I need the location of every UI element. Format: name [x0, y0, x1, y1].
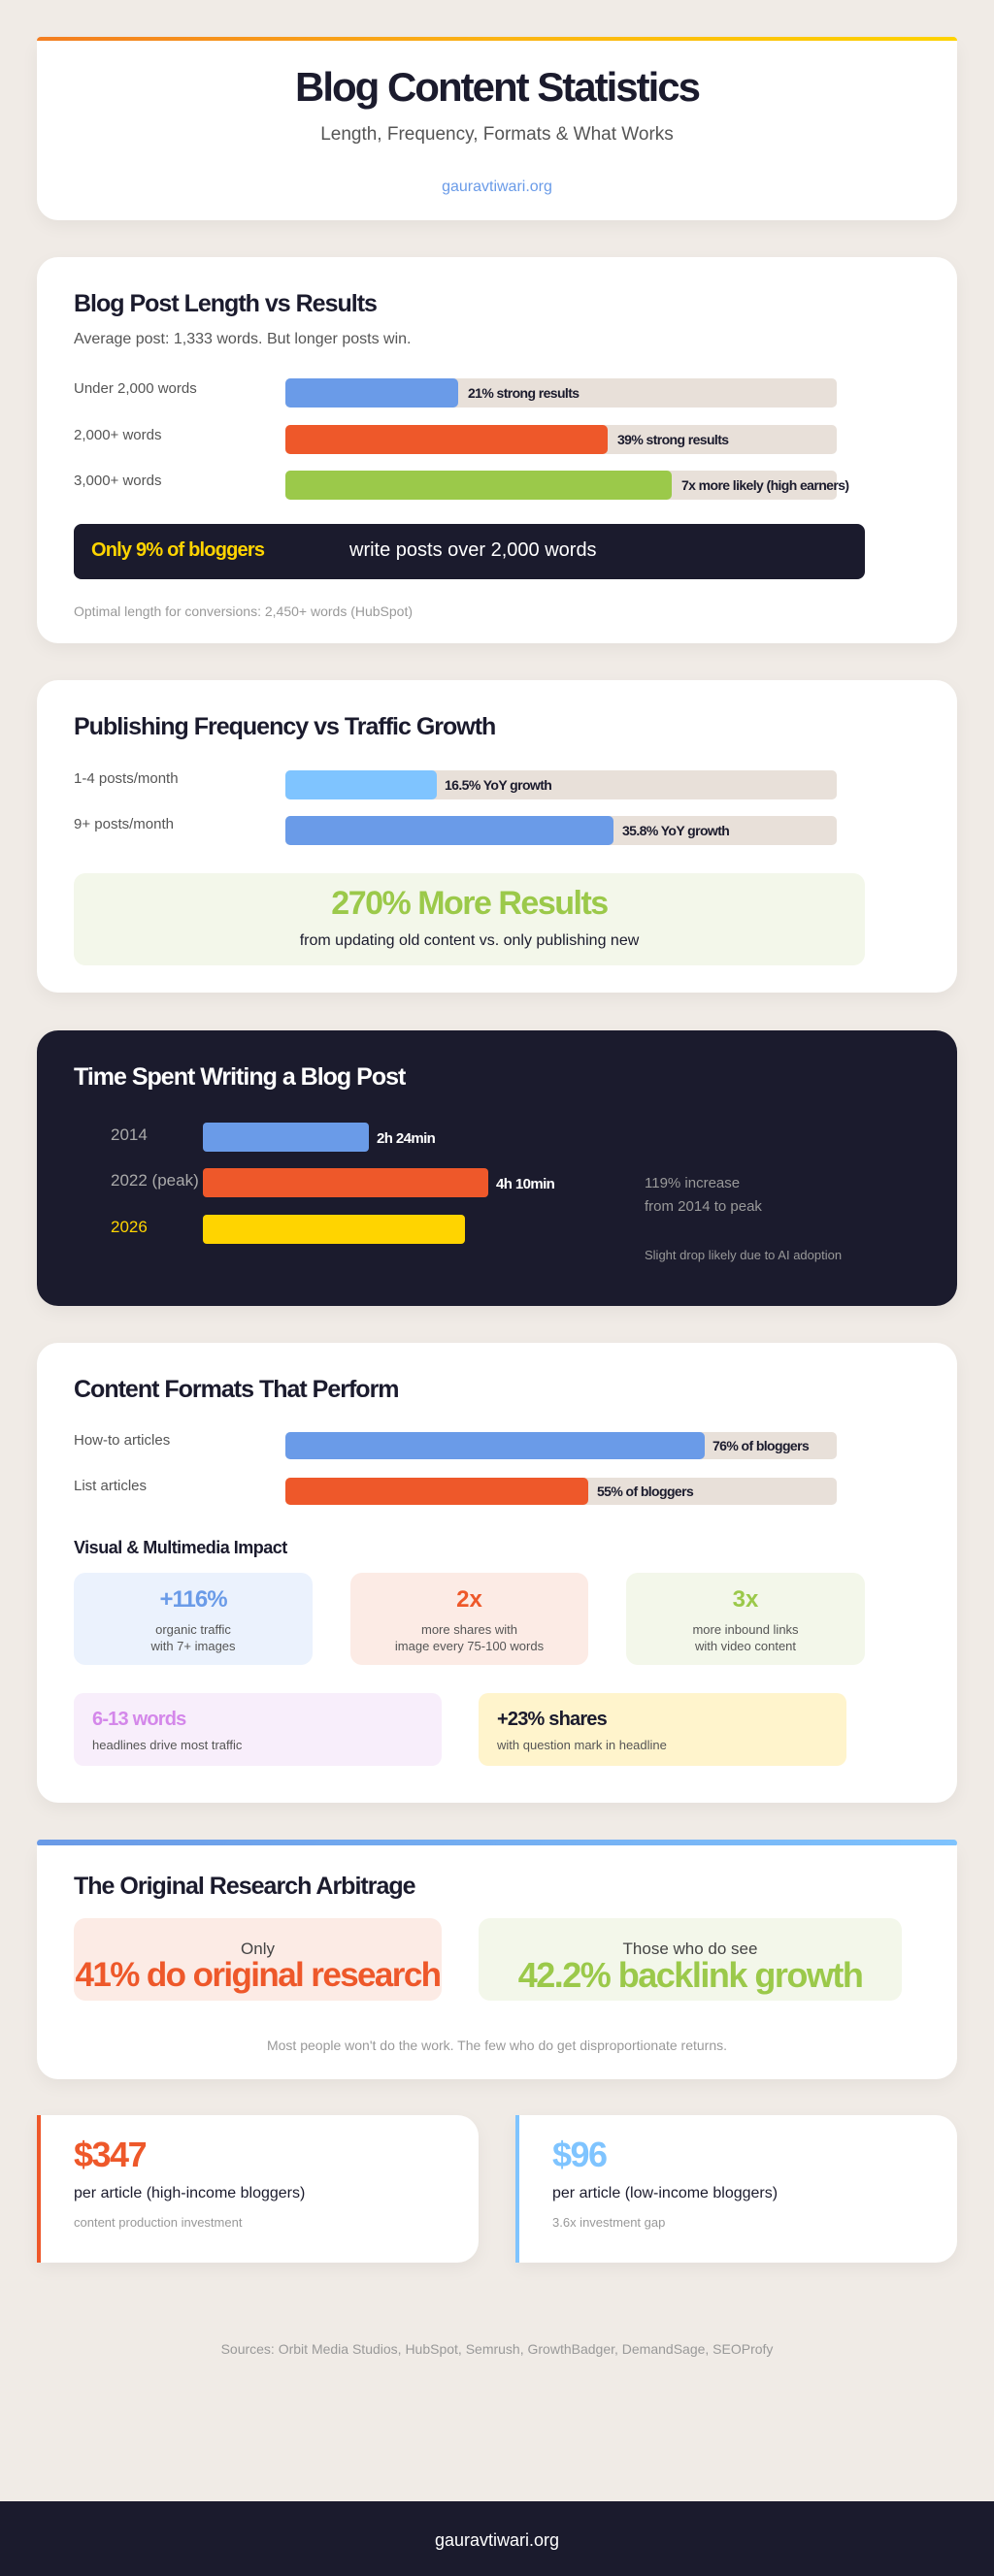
card: $347 — [37, 2115, 479, 2263]
stat box: +116%: with 7+ images — [150, 1639, 236, 1653]
heading: Content Formats That Perform — [74, 1376, 399, 1403]
research gradient bar — [37, 1840, 957, 1846]
panel: content formats — [37, 1343, 957, 1803]
footnote: Most people won't do the work. The few who do get disproportionate returns. — [267, 2038, 727, 2053]
callout: only 9%: Only 9% of bloggers — [91, 539, 264, 561]
subheading: visual impact: Visual & Multimedia Impact — [74, 1538, 287, 1557]
bar: 2026: 2026 — [111, 1218, 148, 1236]
stat box: 2x — [350, 1573, 588, 1665]
footer: gauravtiwari.org — [435, 2530, 559, 2550]
panel: publishing frequency — [37, 680, 957, 993]
bar: 2014 — [111, 1123, 435, 1152]
bar: 2000+ — [74, 425, 837, 454]
stat box: question mark: +23% shares — [497, 1709, 607, 1730]
stat box: 3x — [626, 1573, 865, 1665]
side note: AI: Slight drop likely due to AI adoption — [645, 1248, 842, 1262]
bar: 2000+: 2,000+ words — [74, 427, 161, 443]
card: $347: content production investment — [74, 2215, 242, 2230]
box: 42.2%: 42.2% backlink growth — [518, 1955, 862, 1995]
bar: 9+ posts: 9+ posts/month — [74, 816, 174, 832]
stat box: 2x: more shares with — [421, 1622, 517, 1637]
site link: gauravtiwari.org — [442, 179, 552, 195]
bar: 2022 peak: 4h 10min — [496, 1176, 554, 1192]
side note: increase: from 2014 to peak — [645, 1198, 762, 1215]
card: $96: $96 — [552, 2135, 607, 2174]
heading: The Original Research Arbitrage — [74, 1873, 415, 1900]
sources: Sources: Orbit Media Studios, HubSpot, Semrush, GrowthBadger, DemandSage, SEOProfy — [221, 2341, 773, 2357]
bar: 2014: 2h 24min — [377, 1130, 435, 1147]
footer — [0, 2501, 994, 2576]
card: $347: per article (high-income bloggers) — [74, 2185, 305, 2201]
callout: only 9% — [74, 524, 865, 579]
panel: time spent writing (dark) — [37, 1030, 957, 1306]
heading: Blog Post Length vs Results — [74, 290, 377, 317]
bar: 1-4 posts — [74, 770, 837, 799]
box: 42.2% — [479, 1918, 902, 2001]
bar: 2022 peak: 2022 (peak) — [111, 1171, 199, 1190]
panel: original research — [37, 1845, 957, 2079]
heading: Time Spent Writing a Blog Post — [74, 1063, 405, 1091]
callout: 270% more results: from updating old content vs. only publishing new — [300, 932, 639, 949]
title: Blog Content Statistics — [295, 64, 699, 110]
stat box: headlines: headlines drive most traffic — [92, 1738, 242, 1752]
panel: blog post length — [37, 257, 957, 643]
subtitle: Length, Frequency, Formats & What Works — [320, 124, 674, 145]
bar: 2022 peak — [111, 1168, 554, 1197]
bar: under 2000 — [74, 378, 837, 408]
bar: 1-4 posts: 16.5% YoY growth — [445, 777, 551, 793]
stat box: 2x: image every 75-100 words — [395, 1639, 544, 1653]
stat box: question mark: with question mark in headline — [497, 1738, 667, 1752]
box: 41%: 41% do original research — [76, 1956, 440, 1994]
box: 42.2%: Those who do see — [623, 1940, 757, 1958]
side note: increase — [645, 1175, 762, 1215]
stat box: headlines: 6-13 words — [92, 1709, 185, 1730]
bar: how-to: 76% of bloggers — [712, 1438, 809, 1453]
bar: how-to: How-to articles — [74, 1432, 170, 1449]
bar: 2000+: 39% strong results — [617, 432, 728, 447]
card: $96: per article (low-income bloggers) — [552, 2185, 778, 2201]
bar: under 2000: 21% strong results — [468, 385, 579, 401]
stat box: question mark — [479, 1693, 846, 1766]
callout: 270% more results — [74, 873, 865, 965]
stat box: +116%: organic traffic — [155, 1622, 231, 1637]
stat box: +116% — [74, 1573, 313, 1665]
header card — [37, 41, 957, 220]
card: $347: $347 — [74, 2135, 146, 2174]
bar: 3000+: 7x more likely (high earners) — [681, 477, 848, 493]
bar: 3000+: 3,000+ words — [74, 473, 161, 489]
bar: 9+ posts: 35.8% YoY growth — [622, 823, 729, 838]
stat box: 3x: with video content — [695, 1639, 796, 1653]
callout: only 9%: write posts over 2,000 words — [349, 539, 597, 561]
stat box: 2x: 2x — [456, 1586, 482, 1613]
box: 41% — [74, 1918, 442, 2001]
box: 41%: Only — [241, 1940, 275, 1958]
header gradient bar — [37, 37, 957, 45]
bar: 2026 — [111, 1215, 465, 1244]
card: $96: 3.6x investment gap — [552, 2215, 665, 2230]
bar: how-to — [74, 1432, 837, 1459]
bar: 3000+ — [74, 471, 848, 500]
stat box: +116%: +116% — [159, 1586, 227, 1613]
side note: increase: 119% increase — [645, 1175, 740, 1191]
bar: list: List articles — [74, 1478, 147, 1494]
heading: Publishing Frequency vs Traffic Growth — [74, 713, 495, 740]
stat box: 3x: more inbound links — [692, 1622, 799, 1637]
bar: under 2000: Under 2,000 words — [74, 380, 197, 397]
footnote: Optimal length for conversions: 2,450+ words (HubSpot) — [74, 603, 413, 619]
subheading: Average post: 1,333 words. But longer posts win. — [74, 331, 411, 347]
stat box: headlines — [74, 1693, 442, 1766]
bar: 1-4 posts: 1-4 posts/month — [74, 770, 179, 787]
stat box: 3x: 3x — [733, 1586, 758, 1613]
bar: list: 55% of bloggers — [597, 1484, 693, 1499]
bar: 9+ posts — [74, 816, 837, 845]
bar: list — [74, 1478, 837, 1505]
callout: 270% more results: 270% More Results — [331, 885, 608, 922]
bar: 2014: 2014 — [111, 1125, 148, 1144]
card: $96 — [515, 2115, 957, 2263]
